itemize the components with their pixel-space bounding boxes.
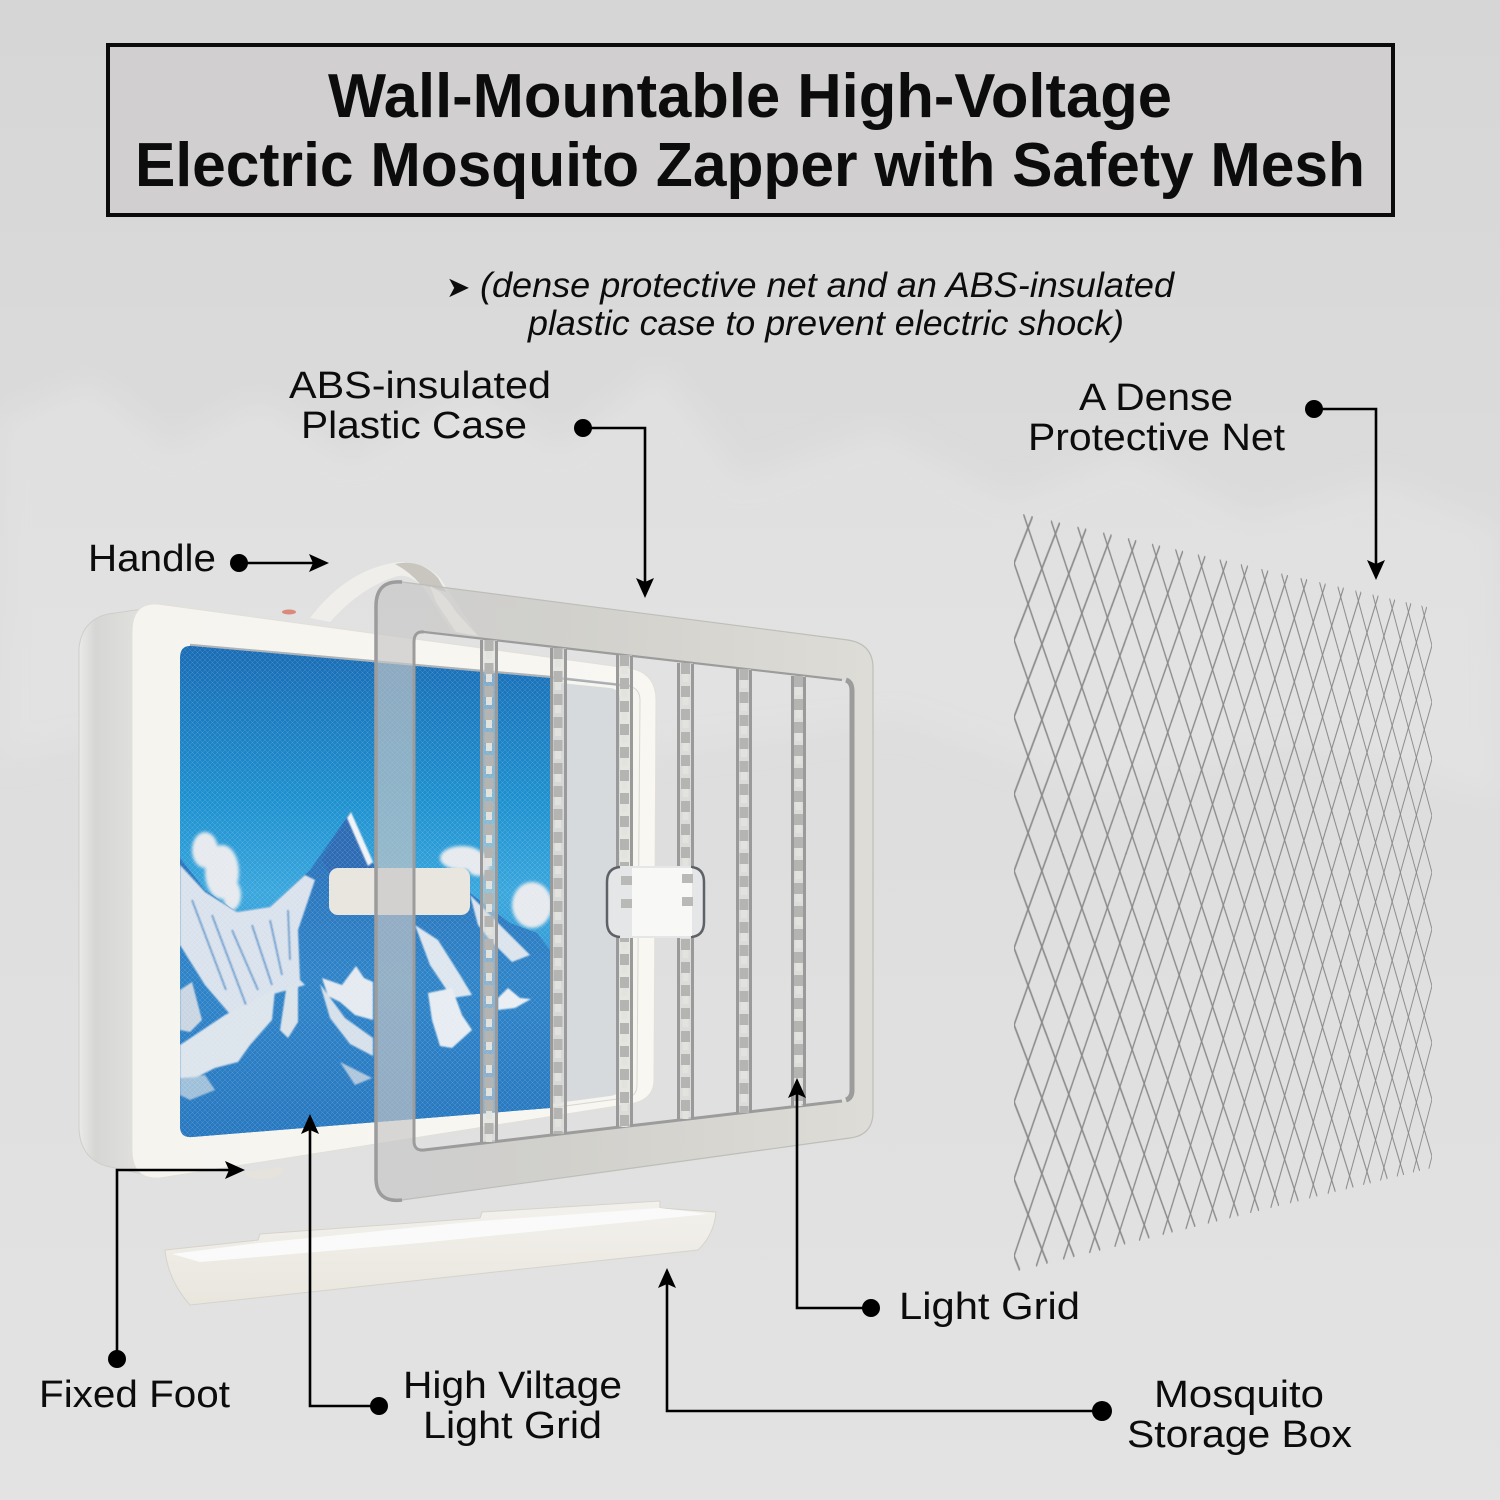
label: High Viltage Light Grid: Light Grid xyxy=(423,1405,602,1447)
frame xyxy=(376,582,873,1200)
mosquito storage box xyxy=(165,1201,716,1305)
clouds xyxy=(192,832,552,928)
handle strap seen through frame xyxy=(430,586,478,636)
subtitle note: plastic case to prevent electric shock) xyxy=(527,304,1124,343)
label: High Viltage Light Grid: High Viltage xyxy=(403,1365,622,1407)
arrow: storage box xyxy=(658,1268,1112,1421)
handle strap xyxy=(310,562,478,636)
label: Fixed Foot: Fixed Foot xyxy=(39,1374,230,1416)
title line 1: Wall-Mountable High-Voltage xyxy=(328,62,1172,131)
window top shadow xyxy=(190,645,630,686)
protective mesh net xyxy=(1014,514,1432,1271)
label: A Dense Protective Net: Protective Net xyxy=(1028,417,1285,459)
title line 2: Electric Mosquito Zapper with Safety Mesh xyxy=(135,131,1365,200)
label: ABS-insulated Plastic Case: Plastic Case xyxy=(301,405,527,447)
inner window bezel xyxy=(550,678,640,1108)
label: A Dense Protective Net: A Dense xyxy=(1079,377,1233,419)
exploded product: zapper device xyxy=(79,562,656,1179)
arrow: plastic case xyxy=(574,419,654,598)
fixed foot xyxy=(244,1167,284,1179)
centre clip xyxy=(607,866,704,938)
translucent window right of panel xyxy=(550,682,620,1104)
arrow: fixed foot xyxy=(108,1161,245,1368)
label: High Viltage Light Grid xyxy=(403,1365,622,1447)
arrow: light grid xyxy=(788,1078,880,1317)
label: ABS-insulated Plastic Case xyxy=(289,365,551,447)
label: Handle: Handle xyxy=(88,538,216,580)
subtitle note xyxy=(446,266,1176,343)
transparent light grid frame xyxy=(376,582,873,1200)
subtitle note: (dense protective net and an ABS-insulated xyxy=(480,266,1176,305)
label: A Dense Protective Net xyxy=(1028,377,1285,459)
device centre pill handle xyxy=(329,868,470,915)
label: Mosquito Storage Box: Mosquito xyxy=(1154,1374,1324,1416)
arrow: high voltage grid xyxy=(301,1114,388,1415)
label: Mosquito Storage Box xyxy=(1127,1374,1352,1456)
label: Mosquito Storage Box: Storage Box xyxy=(1127,1414,1352,1456)
device front shell xyxy=(132,604,656,1178)
label: ABS-insulated Plastic Case: ABS-insulated xyxy=(289,365,551,407)
snow streaks xyxy=(180,812,531,1100)
title box xyxy=(108,45,1393,215)
label: Light Grid: Light Grid xyxy=(899,1286,1080,1328)
labels and leader arrows xyxy=(39,365,1385,1456)
mountain mass xyxy=(180,813,550,1140)
vertical grid bars xyxy=(481,640,805,1142)
frame edges xyxy=(376,582,873,1200)
arrow: handle xyxy=(230,554,329,572)
arrow: protective net xyxy=(1305,400,1385,580)
power button xyxy=(282,610,296,614)
subtitle note: ➤ xyxy=(446,270,470,304)
device side panel xyxy=(79,608,160,1178)
blue mountain panel xyxy=(180,640,552,1140)
